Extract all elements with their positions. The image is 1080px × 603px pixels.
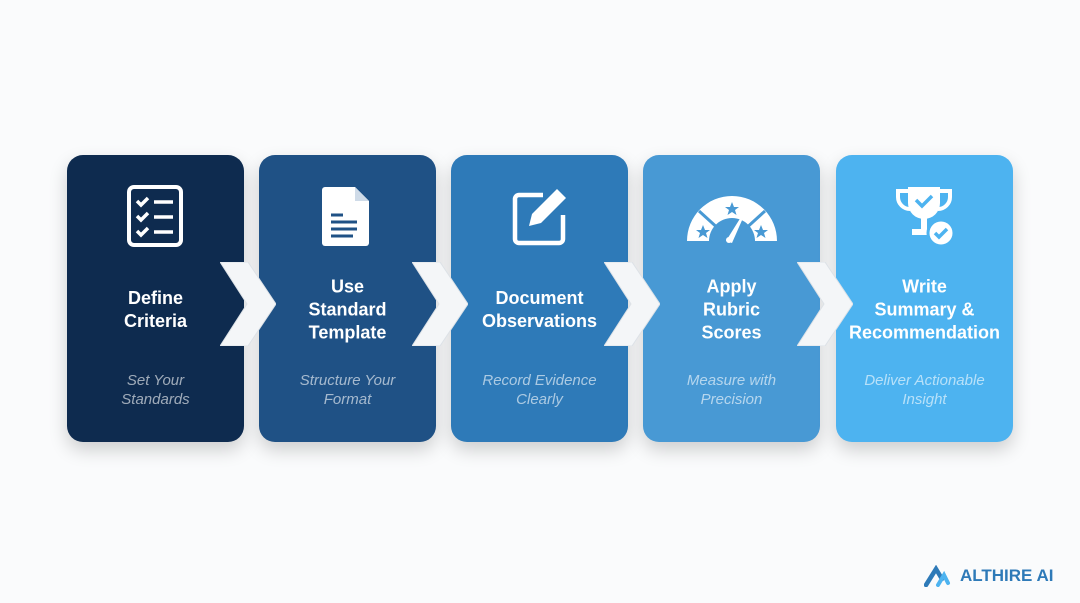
subtitle: Standards [121,391,190,408]
title: Document [495,288,584,308]
subtitle: Clearly [516,391,563,408]
title [701,276,762,342]
card 4: Apply Rubric Scores [643,155,820,442]
title: Apply [706,276,756,296]
subtitle [687,372,776,408]
icon: checklist [127,185,183,247]
subtitle: Precision [701,391,762,408]
title: Criteria [124,311,187,331]
card 5: Write Summary & Recommendation [836,155,1013,442]
title: Use [331,276,364,296]
title: Recommendation [849,322,1000,342]
icon: trophy with check [896,187,952,244]
subtitle [864,372,985,408]
card 2: Use Standard Template [259,155,436,442]
logo text: ALTHIRE AI [960,566,1054,585]
card 3: Document Observations [451,155,628,442]
title: Scores [701,322,762,342]
arrow 1 [220,262,276,346]
arrow 2 [412,262,468,346]
title: Template [309,322,386,342]
title [849,276,1000,342]
arrow 3 [604,262,660,346]
title [124,288,188,331]
arrow 4 [797,262,853,346]
subtitle: Format [324,391,371,408]
subtitle: Deliver Actionable [864,372,985,389]
card 1: Define Criteria [67,155,244,442]
title: Write [902,276,947,296]
logo icon [924,565,950,587]
title: Standard [308,300,386,320]
icon: document [322,187,369,246]
subtitle: Record Evidence [482,372,597,389]
title: Define [128,288,183,308]
subtitle: Measure with [687,372,776,389]
title: Summary & [874,300,975,320]
subtitle: Insight [902,391,947,408]
icon: gauge [687,196,777,243]
subtitle [482,372,597,408]
logo [924,565,1054,587]
subtitle: Structure Your [300,372,395,389]
subtitle [300,372,396,408]
icon: edit [512,189,566,246]
title: Observations [482,311,597,331]
title: Rubric [703,300,760,320]
title [308,276,386,342]
subtitle: Set Your [127,372,184,389]
title [482,288,597,331]
subtitle [121,372,190,408]
